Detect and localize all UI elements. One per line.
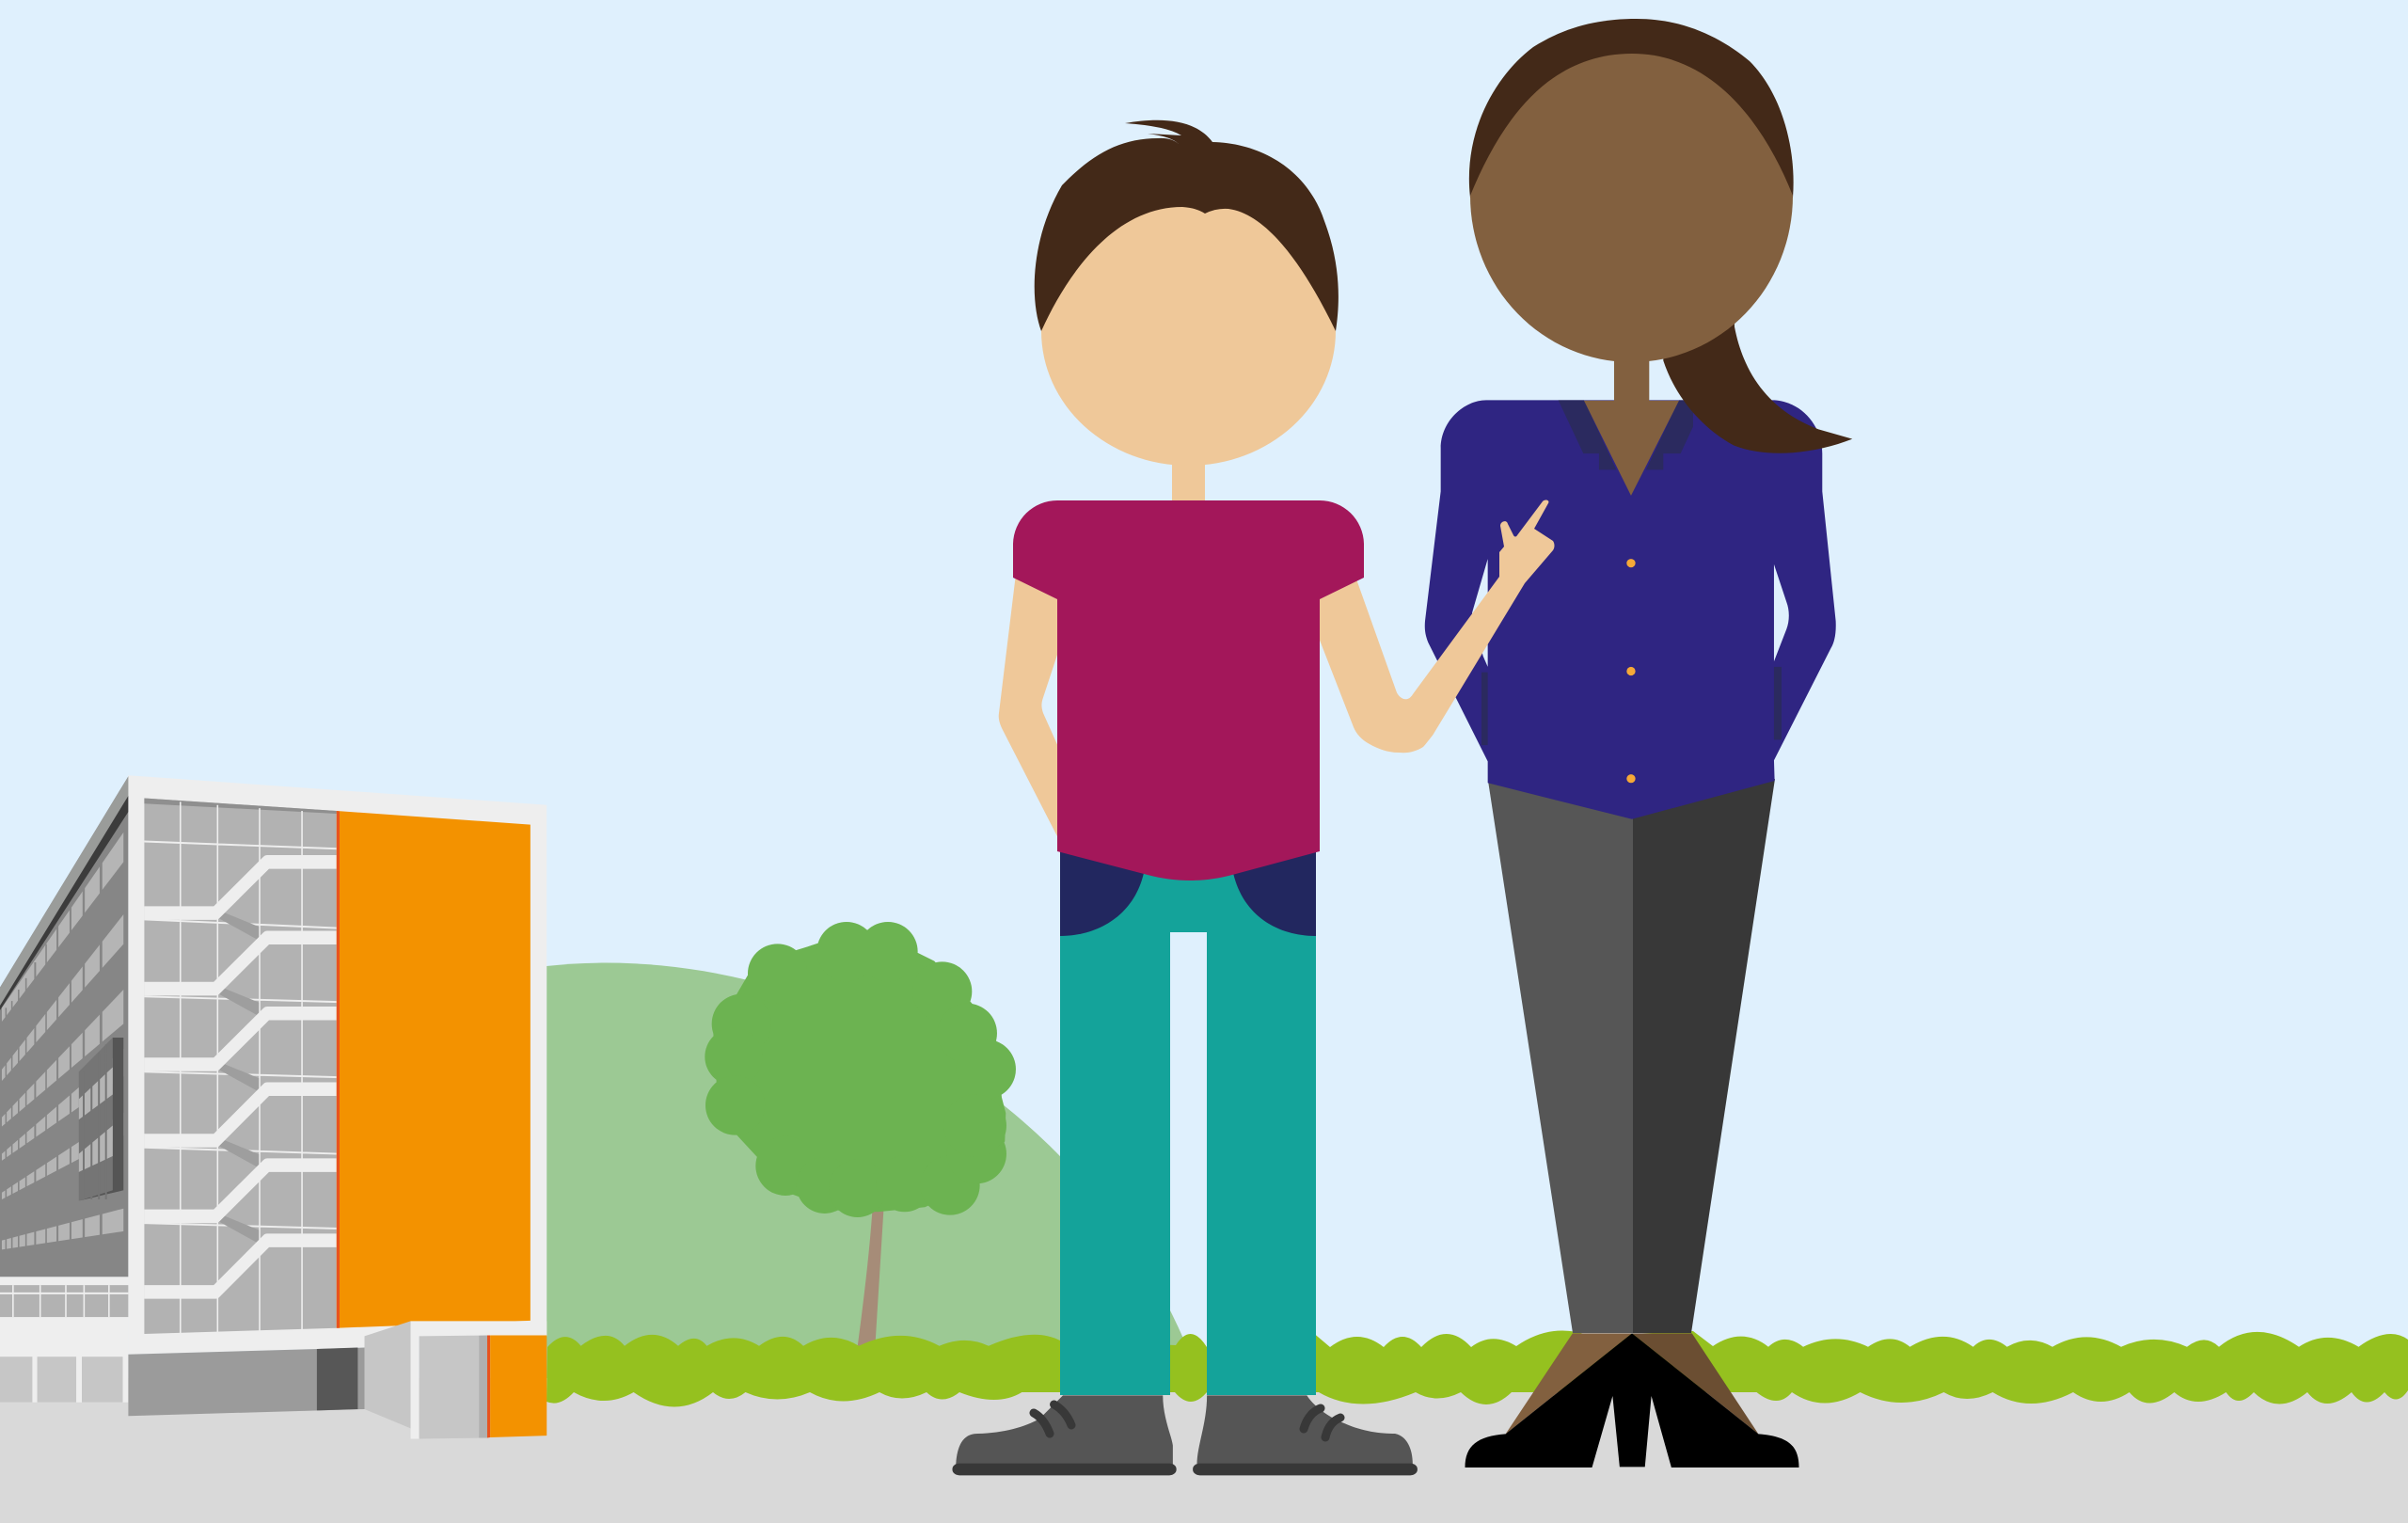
man shoes xyxy=(952,1395,1418,1475)
entrance glass edge xyxy=(479,1335,487,1438)
man hair xyxy=(1035,120,1339,331)
ponytail xyxy=(1663,302,1852,453)
entrance frame xyxy=(411,1321,547,1438)
window gaps xyxy=(6,857,101,1254)
ground floor white band xyxy=(0,1277,128,1403)
woman xyxy=(1425,19,1852,1467)
side windows xyxy=(2,833,123,1249)
man trousers xyxy=(1060,847,1316,1395)
tree xyxy=(705,922,1016,1347)
glazing grid xyxy=(144,801,338,1334)
ground floor window strip xyxy=(0,1285,128,1317)
stair shadows xyxy=(217,912,259,1244)
building side wall xyxy=(0,776,128,1277)
base wall xyxy=(128,1348,364,1416)
entrance orange panel xyxy=(490,1335,547,1437)
tree trunk xyxy=(858,1201,884,1347)
left shoe xyxy=(952,1395,1177,1475)
trouser pockets xyxy=(1060,851,1316,936)
facade glazing xyxy=(144,798,337,1334)
entrance red stripe xyxy=(487,1335,490,1438)
pocket shadows xyxy=(1481,667,1782,745)
roof edge xyxy=(0,776,128,1006)
front facade frame xyxy=(128,775,547,1355)
arm gap right xyxy=(1774,564,1789,661)
woman trousers xyxy=(1488,779,1775,1333)
entrance canopy side xyxy=(364,1321,411,1428)
woman blouse xyxy=(1425,400,1836,819)
building xyxy=(0,775,547,1438)
man right arm and pointing hand xyxy=(1312,500,1554,753)
woman legs and shoes xyxy=(1465,1333,1798,1467)
collar xyxy=(1559,400,1693,469)
ground xyxy=(0,1378,2408,1523)
dark doorway xyxy=(317,1348,357,1410)
woman face xyxy=(1470,54,1793,362)
staircase xyxy=(144,862,337,1292)
right shoe xyxy=(1193,1395,1418,1475)
projecting box on side wall xyxy=(79,1038,123,1200)
hill xyxy=(547,963,1184,1383)
buttons xyxy=(1626,559,1636,783)
red stripe xyxy=(337,811,340,1328)
tree crown xyxy=(705,922,1016,1217)
woman torso xyxy=(1425,302,1852,819)
ground floor panels xyxy=(0,1356,122,1403)
man face xyxy=(1041,207,1336,466)
glazing top shadow xyxy=(144,798,337,814)
woman neck and neckline xyxy=(1584,345,1679,496)
woman hair xyxy=(1469,19,1794,198)
arm gap left xyxy=(1472,559,1488,667)
entrance glass xyxy=(420,1335,487,1438)
roof shadow strip xyxy=(0,796,128,1010)
man neck xyxy=(1172,452,1205,500)
orange panel xyxy=(337,811,531,1328)
man t-shirt xyxy=(1013,500,1364,880)
man xyxy=(952,120,1554,1475)
man left arm xyxy=(999,574,1059,840)
hedge xyxy=(547,1331,2408,1407)
